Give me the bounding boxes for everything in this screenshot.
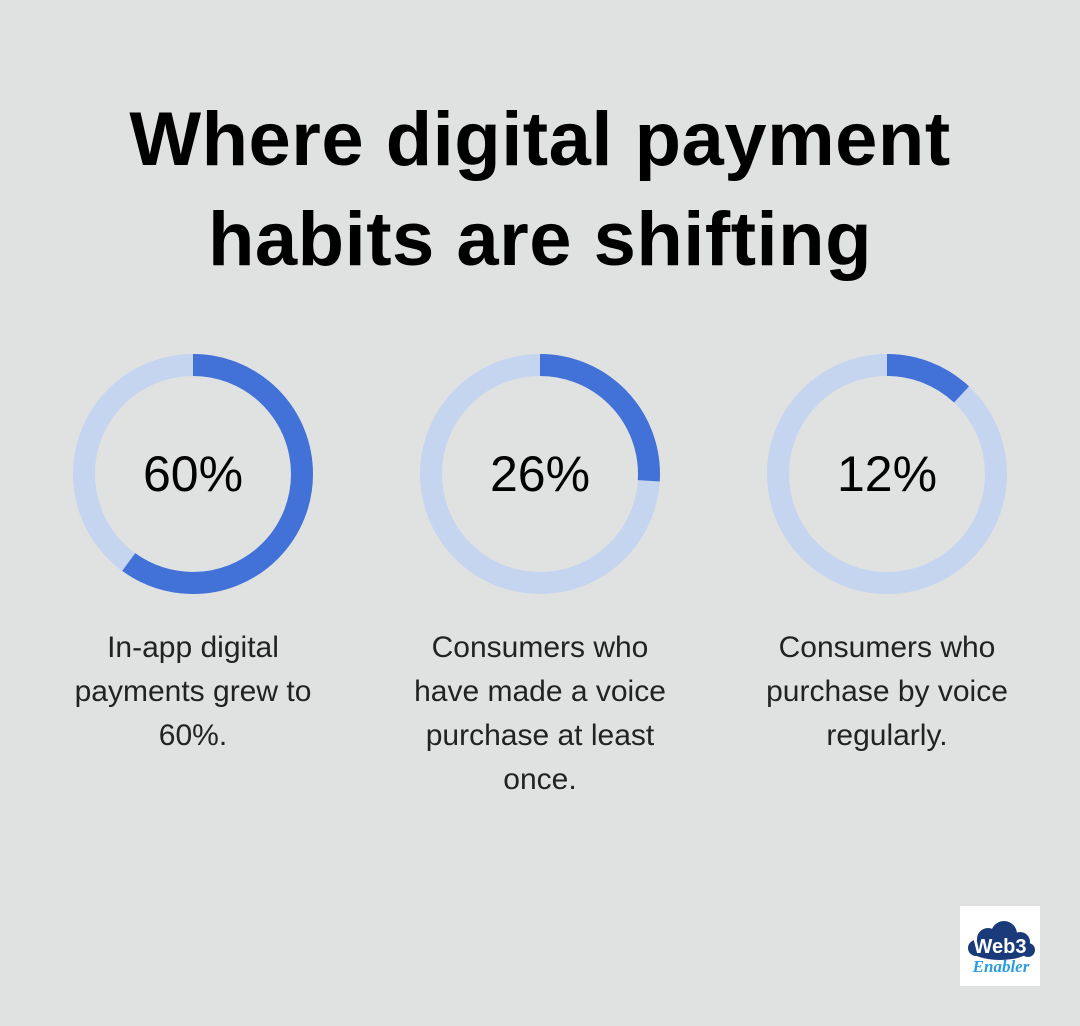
label: have made a voice [414,675,666,708]
number: 60% [143,446,243,502]
logo: Web3 Enabler [960,906,1040,986]
label: In-app digital [107,631,279,664]
label [414,631,666,796]
label: payments grew to [75,675,311,708]
label: purchase by voice [766,675,1008,708]
number: 12% [837,446,937,502]
donut chart 26% [420,354,660,594]
donut chart 60% [73,354,313,594]
number: 26% [490,446,590,502]
label: regularly. [826,719,948,752]
label [766,631,1008,752]
label [75,631,311,752]
label: Consumers who [779,631,995,664]
label: 60%. [159,719,227,752]
logo: Web3 Enabler: Enabler [972,957,1030,976]
panel: stat 26% [414,354,666,796]
label: Consumers who [432,631,648,664]
panel: stat 60% [73,354,313,752]
title: habits are shifting [208,197,872,282]
donut chart 12% [767,354,1007,594]
title: Where digital payment [129,97,951,182]
title [129,97,951,282]
label: once. [503,763,577,796]
label: purchase at least [426,719,654,752]
logo: Web3 Enabler: Web3 [974,936,1026,958]
panel: stat 12% [766,354,1008,752]
